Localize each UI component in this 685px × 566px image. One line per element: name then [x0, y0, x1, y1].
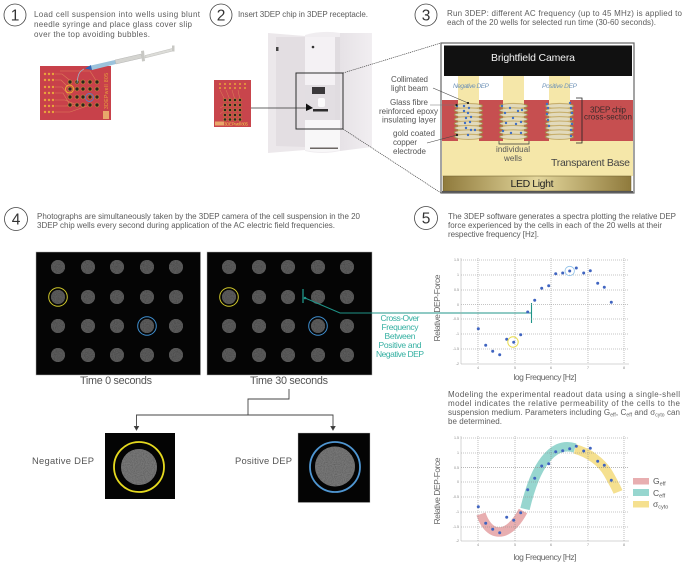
tick labels: 1.5: [454, 258, 459, 262]
step 1 number: 1: [11, 8, 19, 24]
step 5 text: force experienced by the cells in each of the 20 wells at their: [448, 221, 662, 230]
transparent base label: Transparent Base: [551, 157, 630, 169]
callout labels: light beam: [391, 84, 428, 93]
brightfield camera: [444, 46, 632, 76]
bracket: chip cross-section: 3DEP chip: [590, 106, 627, 114]
zoom guide lines: [343, 43, 441, 193]
step 5 number: [414, 206, 438, 230]
image: time 30 seconds: [207, 252, 372, 375]
coloured model bands: [481, 447, 618, 532]
modeling text: eff: [610, 412, 616, 418]
bracket: individual wells: individual: [496, 145, 530, 154]
modeling text: , C: [616, 408, 626, 417]
arrow: branching to close-ups: [134, 389, 335, 430]
step 1 number: [4, 4, 26, 26]
step 4 text: 3DEP chip wells every second during application of the AC electric field frequencies.: [37, 221, 335, 230]
tick labels: 0: [457, 480, 459, 484]
tick labels: [453, 436, 459, 543]
callout labels: insulating layer: [382, 116, 436, 124]
chart: measured spectrum: 6: [550, 366, 552, 370]
chart: single-shell model fit: 5: [514, 543, 516, 547]
chart: single-shell model fit: log Frequency [Hz]: [514, 552, 576, 562]
step 1: [4, 4, 201, 120]
modeling text: Modeling the experimental readout data using a single-shell: [448, 390, 680, 399]
cross-over frequency callout: Positive and: [378, 340, 422, 350]
transparent base: [442, 141, 633, 176]
callout labels: Glass fibre: [390, 98, 429, 107]
legend: σ: [653, 499, 658, 509]
legend: C: [653, 488, 659, 498]
tick labels: -2: [456, 539, 459, 543]
step 5 text: The 3DEP software generates a spectra plotting the relative DEP: [448, 212, 676, 221]
modeling text: eff: [626, 412, 633, 418]
callout labels: reinforced epoxy: [379, 107, 438, 116]
chart: measured spectrum: 4: [477, 366, 479, 370]
chart: single-shell model fit: 6: [550, 543, 552, 547]
chart: measured spectrum: 8: [623, 366, 625, 370]
tick labels: 1: [457, 273, 459, 277]
close-up: positive DEP well: [298, 433, 370, 502]
step 2 text: Insert 3DEP chip in 3DEP receptacle.: [238, 10, 368, 19]
label: positive DEP: Positive DEP: [235, 455, 292, 466]
tick labels: -1: [456, 510, 459, 514]
zoom box: [296, 73, 343, 129]
step 4 number: 4: [12, 212, 21, 228]
cross-over frequency callout: Negative DEP: [376, 349, 424, 359]
step 3 number: 3: [422, 8, 430, 24]
chip red band: [442, 100, 633, 141]
step 4 text: [37, 212, 361, 230]
icon: red chip with syringe: [40, 46, 174, 120]
step 5 text: [448, 212, 676, 239]
brightfield camera: Brightfield Camera: [491, 52, 575, 64]
cross-over frequency callout: Between: [384, 331, 416, 341]
panel: chip cross-section: [441, 43, 634, 193]
caption: time 30: Time 30 seconds: [250, 375, 329, 387]
step 4 number: [4, 208, 28, 230]
tick labels: -2: [456, 362, 459, 366]
bracket: chip cross-section: cross-section: [584, 112, 632, 122]
legend: [633, 476, 668, 510]
tick labels: 0: [457, 303, 459, 307]
step 3: [379, 4, 683, 193]
DEP labels: [453, 83, 578, 90]
step 5 number: 5: [422, 210, 430, 228]
chart: single-shell model fit: 8: [623, 543, 625, 547]
legend: cyto: [658, 504, 668, 510]
chart: measured spectrum: [432, 258, 629, 382]
bracket: chip cross-section: [576, 98, 632, 143]
step 3 text: [447, 9, 683, 27]
cross-over frequency callout: [303, 289, 532, 359]
chart: single-shell model fit: 4: [477, 543, 479, 547]
legend: eff: [660, 482, 666, 488]
chart: measured spectrum: 7: [587, 366, 589, 370]
step 2 number: [210, 4, 232, 26]
tick labels: -0.5: [453, 495, 459, 499]
callout labels: [379, 75, 469, 156]
step 4: [4, 208, 372, 502]
bracket: individual wells: wells: [503, 154, 522, 163]
step 1 text: [34, 10, 201, 39]
DEP labels: Negative DEP: [453, 83, 490, 90]
caption: time 0: Time 0 seconds: [80, 375, 153, 387]
callout labels: electrode: [393, 147, 427, 156]
tick labels: -1: [456, 332, 459, 336]
modeling text: model indicates the relative permeability of the cells to the: [448, 399, 681, 408]
tick labels: 0.5: [454, 288, 459, 292]
modeling text: suspension medium. Parameters including G: [448, 408, 610, 417]
callout labels: gold coated: [393, 129, 435, 138]
arrow: chip into receptacle: [251, 104, 313, 111]
axis titles: Relative DEP-Force: [432, 457, 442, 524]
label: negative DEP: Negative DEP: [32, 455, 94, 466]
icon: small chip: 3DEPwell 805: [224, 122, 248, 126]
step 5 text: respective frequency [Hz].: [448, 230, 539, 239]
bracket: individual wells: [496, 141, 530, 163]
chart: measured spectrum: log Frequency [Hz]: [514, 372, 576, 382]
tick labels: -1.5: [453, 525, 459, 529]
step 3 number: [415, 4, 437, 26]
tick labels: 0.5: [454, 466, 459, 470]
icon: red chip with syringe: 3DEPwell 805: [104, 73, 110, 109]
LED light: LED Light: [510, 178, 554, 190]
step 2: [210, 4, 441, 193]
modeling text: cyto: [655, 412, 665, 418]
step 1 text: Load cell suspension into wells using blunt: [34, 10, 201, 19]
tick labels: [453, 258, 459, 366]
legend: G: [653, 476, 660, 486]
tick labels: 1.5: [454, 436, 459, 440]
modeling text: be determined.: [448, 417, 502, 426]
step 5: [414, 206, 681, 562]
3DEP receptacle device: [268, 32, 372, 153]
tick labels: 1: [457, 451, 459, 455]
modeling text: and σ: [632, 408, 655, 417]
step 3 text: each of the 20 wells for selected run time (30-60 seconds).: [447, 18, 656, 27]
LED light: [442, 176, 633, 192]
callout labels: copper: [393, 138, 417, 147]
step 1 text: over the top avoiding bubbles.: [34, 30, 150, 39]
cross-over frequency callout: Cross-Over: [380, 313, 420, 323]
data points: [477, 445, 613, 534]
chart: single-shell model fit: 7: [587, 543, 589, 547]
axis titles: Relative DEP-Force: [432, 274, 442, 342]
cross-over frequency callout: Frequency: [382, 322, 419, 332]
grid: [461, 258, 629, 364]
DEP labels: Positive DEP: [542, 83, 578, 90]
step 1 text: needle syringe and place glass cover slip: [34, 20, 193, 29]
callout labels: Collimated: [391, 75, 428, 84]
image: time 0 seconds: [36, 252, 200, 375]
grid: [461, 436, 629, 541]
legend: eff: [659, 494, 666, 500]
light beams: [458, 76, 570, 141]
step 3 text: Run 3DEP: different AC frequency (up to 45 MHz) is applied to: [447, 9, 683, 18]
icon: small chip: [214, 80, 251, 127]
coiled wells: [454, 102, 574, 140]
tick labels: -1.5: [453, 347, 459, 351]
step 4 text: Photographs are simultaneously taken by the 3DEP camera of the cell suspension in the 20: [37, 212, 361, 221]
cells: [456, 102, 573, 137]
close-up: negative DEP well: [105, 433, 175, 499]
modeling text: [448, 390, 681, 426]
chart: single-shell model fit: [432, 436, 629, 562]
chart: measured spectrum: 5: [514, 366, 516, 370]
tick labels: -0.5: [453, 317, 459, 321]
data points: [477, 266, 613, 356]
step 2 number: 2: [217, 8, 225, 24]
modeling text: can: [665, 408, 680, 417]
